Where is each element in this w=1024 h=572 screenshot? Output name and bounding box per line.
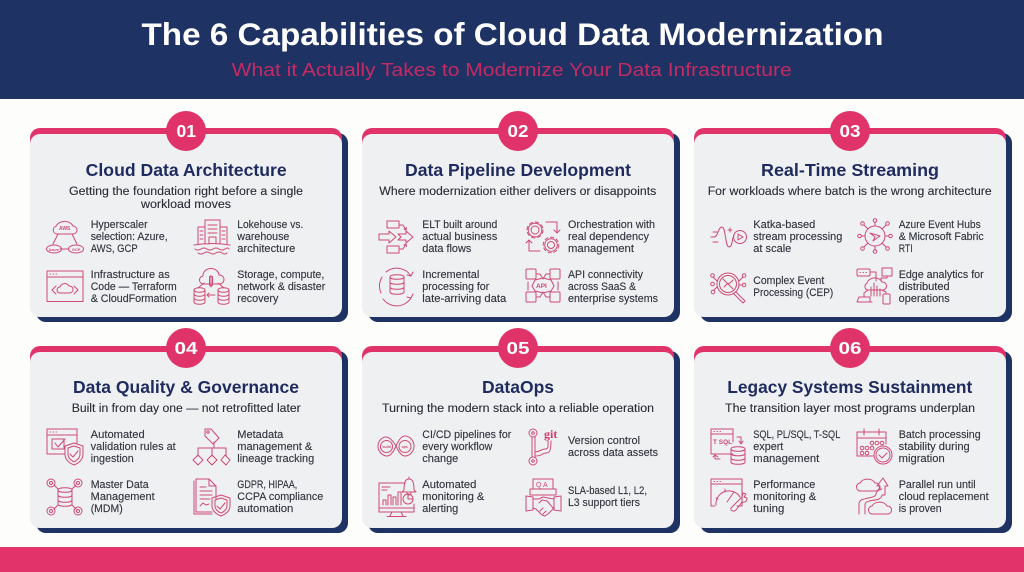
item text: performance: monitoring & bbox=[753, 491, 817, 503]
item text: parallel run: is proven bbox=[899, 503, 942, 515]
item text: orchestration bbox=[568, 219, 655, 255]
icon: ELT flow arrows bbox=[379, 221, 413, 253]
item text: orchestration: real dependency bbox=[568, 231, 650, 243]
item text: Azure Event Hubs bbox=[899, 219, 984, 255]
item text: batch: stability during bbox=[899, 441, 970, 453]
item text: lakehouse: architecture bbox=[237, 243, 295, 255]
item text: CI/CD bbox=[422, 429, 512, 465]
description: workload moves bbox=[140, 197, 231, 211]
item text: storage: recovery bbox=[237, 293, 279, 305]
item text: Azure Event Hubs: Azure Event Hubs bbox=[899, 219, 981, 231]
item text: orchestration: Orchestration with bbox=[568, 219, 655, 231]
item text: CEP: Processing (CEP) bbox=[753, 287, 833, 299]
item text: SQL: management bbox=[753, 453, 819, 465]
icon: Kafka stream wave bbox=[711, 227, 746, 247]
item text: API: across SaaS & bbox=[568, 281, 637, 293]
item text: parallel run: Parallel run until bbox=[899, 479, 976, 491]
badge 04: 04 bbox=[174, 338, 198, 358]
item text: GDPR: CCPA compliance bbox=[237, 491, 323, 503]
description: Where modernization either delivers or disappoints bbox=[379, 184, 656, 198]
item text: Azure Event Hubs: & Microsoft Fabric bbox=[899, 231, 984, 243]
item text: ELT bbox=[422, 219, 498, 255]
heading: Legacy Systems Sustainment bbox=[727, 377, 972, 397]
icon: multi-cloud AWS Azure GCP: AWS bbox=[59, 226, 71, 232]
heading: Cloud Data Architecture bbox=[86, 160, 287, 180]
heading: Data Quality & Governance bbox=[73, 377, 299, 397]
header band bbox=[0, 0, 1024, 99]
icon: metadata tags tree bbox=[193, 429, 230, 465]
panel: 05 DataOps bbox=[362, 328, 680, 533]
item text: GDPR bbox=[237, 479, 323, 515]
item text: CI/CD: every workflow bbox=[422, 441, 492, 453]
item text: Kafka: at scale bbox=[753, 243, 791, 255]
badge 05 bbox=[498, 328, 538, 368]
description: For workloads where batch is the wrong architecture bbox=[708, 184, 992, 198]
panel: 03 Real-Time Streaming bbox=[694, 111, 1012, 322]
badge 04 bbox=[166, 328, 206, 368]
badge 01: 01 bbox=[176, 121, 196, 141]
badge 03 bbox=[830, 111, 870, 151]
icon: lakehouse building bbox=[194, 220, 230, 254]
badge 03: 03 bbox=[840, 121, 861, 141]
item text: performance: tuning bbox=[753, 503, 784, 515]
item text: monitoring: alerting bbox=[422, 503, 458, 515]
badge 01 bbox=[166, 111, 206, 151]
icon: multi-cloud AWS Azure GCP: Azure bbox=[48, 248, 59, 252]
heading: Real-Time Streaming bbox=[761, 160, 939, 180]
item text: CEP bbox=[753, 275, 833, 299]
item text: incremental: late-arriving data bbox=[422, 293, 506, 305]
item text: GDPR: GDPR, HIPAA, bbox=[237, 479, 297, 491]
heading: Data Pipeline Development bbox=[405, 160, 631, 180]
item text: edge analytics: operations bbox=[899, 293, 950, 305]
item text: metadata bbox=[237, 429, 314, 465]
item text: validation: Automated bbox=[91, 429, 145, 441]
icon: multi-cloud AWS Azure GCP bbox=[46, 221, 84, 253]
item text: version control: across data assets bbox=[568, 447, 659, 459]
item text: Kafka: stream processing bbox=[753, 231, 842, 243]
item text: ELT: ELT built around bbox=[422, 219, 497, 231]
description: Turning the modern stack into a reliable operation bbox=[382, 401, 654, 415]
panel: 02 Data Pipeline Development bbox=[362, 111, 680, 322]
item text: SQL: expert bbox=[753, 441, 783, 453]
item text: Kafka bbox=[753, 219, 842, 255]
item text: SLA: L3 support tiers bbox=[568, 497, 641, 509]
item text: version control bbox=[568, 435, 659, 459]
item text: hyperscaler: selection: Azure, bbox=[91, 231, 168, 243]
item text: SQL: SQL, PL/SQL, T-SQL bbox=[753, 429, 840, 441]
item text: API bbox=[568, 269, 659, 305]
item text: API: API connectivity bbox=[568, 269, 644, 281]
item text: performance bbox=[753, 479, 817, 515]
icon: git branch bbox=[529, 427, 557, 465]
item text: hyperscaler: Hyperscaler bbox=[91, 219, 148, 231]
panel: 04 Data Quality & Governance bbox=[30, 328, 348, 533]
panel: 06 Legacy Systems Sustainment bbox=[694, 328, 1012, 533]
icon: SQL window database bbox=[711, 429, 745, 464]
item text: SQL bbox=[753, 429, 840, 465]
icon: multi-cloud AWS Azure GCP: GCP bbox=[72, 248, 81, 252]
item text: parallel run bbox=[899, 479, 989, 515]
badge 02: 02 bbox=[508, 121, 529, 141]
icon: event hub bbox=[858, 219, 892, 253]
icon: SLA handshake bbox=[526, 479, 561, 516]
item text: monitoring: Automated bbox=[422, 479, 476, 491]
icon: CI/CD infinity loop: build bbox=[382, 445, 391, 449]
item text: batch: Batch processing bbox=[899, 429, 981, 441]
item text: orchestration: management bbox=[568, 243, 634, 255]
icon: incremental database cycle bbox=[379, 268, 413, 306]
icon: performance gauge wrench bbox=[711, 479, 747, 511]
item text: metadata: management & bbox=[237, 441, 313, 453]
badge 05: 05 bbox=[506, 338, 530, 358]
item text: metadata: lineage tracking bbox=[237, 453, 314, 465]
item text: validation: validation rules at bbox=[91, 441, 176, 453]
item text: CI/CD: CI/CD pipelines for bbox=[422, 429, 512, 441]
item text: monitoring: monitoring & bbox=[422, 491, 485, 503]
item text: SLA bbox=[568, 485, 647, 509]
item text: incremental: Incremental bbox=[422, 269, 479, 281]
icon: API connectivity: API bbox=[536, 283, 547, 290]
item text: MDM: Master Data bbox=[91, 479, 149, 491]
item text: storage bbox=[237, 269, 326, 305]
icon: SLA handshake: Q A bbox=[536, 482, 548, 489]
item text: CI/CD: change bbox=[422, 453, 458, 465]
item text: Kafka: Katka-based bbox=[753, 219, 815, 231]
icon: SQL window database: T SQL bbox=[713, 439, 732, 446]
icon: parallel run cloud path bbox=[856, 478, 892, 514]
item text: lakehouse: warehouse bbox=[236, 231, 289, 243]
item text: ELT: data flows bbox=[422, 243, 472, 255]
panel: 01 Cloud Data Architecture bbox=[30, 111, 348, 322]
item text: edge analytics: distributed bbox=[899, 281, 950, 293]
description: The transition layer most programs underplan bbox=[725, 401, 975, 415]
item text: GDPR: automation bbox=[237, 503, 293, 515]
item text: SLA: SLA-based L1, L2, bbox=[568, 485, 647, 497]
icon: gears orchestration bbox=[526, 222, 560, 253]
icon: CI/CD infinity loop bbox=[378, 436, 414, 456]
item text: incremental: processing for bbox=[422, 281, 490, 293]
icon: compliance document shield bbox=[194, 479, 230, 516]
item text: incremental bbox=[422, 269, 506, 305]
icon: validation check shield bbox=[47, 429, 83, 465]
icon: infrastructure as code window bbox=[47, 271, 83, 302]
icon: CI/CD infinity loop: ops bbox=[402, 445, 408, 449]
description bbox=[69, 184, 303, 211]
title: The 6 Capabilities of Cloud Data Modernization bbox=[142, 16, 884, 52]
description: Getting the foundation right before a single bbox=[69, 184, 303, 198]
subtitle: What it Actually Takes to Modernize Your Data Infrastructure bbox=[232, 59, 792, 80]
description: Built in from day one — not retrofitted later bbox=[72, 401, 301, 415]
item text: infrastructure as code: & CloudFormation bbox=[91, 293, 177, 305]
footer band bbox=[0, 547, 1024, 572]
item text: edge analytics: Edge analytics for bbox=[899, 269, 984, 281]
item text: hyperscaler: AWS, GCP bbox=[91, 243, 138, 255]
item text: validation bbox=[91, 429, 176, 465]
item text: infrastructure as code bbox=[91, 269, 177, 305]
item text: hyperscaler bbox=[91, 219, 168, 255]
item text: parallel run: cloud replacement bbox=[899, 491, 989, 503]
item text: validation: ingestion bbox=[91, 453, 134, 465]
item text: monitoring bbox=[422, 479, 485, 515]
badge 02 bbox=[498, 111, 538, 151]
item text: storage: Storage, compute, bbox=[237, 269, 324, 281]
item text: batch bbox=[899, 429, 981, 465]
heading: DataOps bbox=[482, 377, 554, 397]
item text: infrastructure as code: Code — Terraform bbox=[91, 281, 177, 293]
icon: complex event magnifier bbox=[711, 273, 746, 303]
item text: version control: Version control bbox=[568, 435, 640, 447]
item text: Azure Event Hubs: RTI bbox=[899, 243, 913, 255]
item text: MDM bbox=[91, 479, 155, 515]
icon: API connectivity bbox=[526, 269, 560, 302]
item text: edge analytics bbox=[899, 269, 984, 305]
item text: ELT: actual business bbox=[422, 231, 498, 243]
item text: MDM: (MDM) bbox=[91, 503, 123, 515]
icon: git branch: git bbox=[544, 427, 557, 441]
item text: metadata: Metadata bbox=[237, 429, 283, 441]
item text: lakehouse bbox=[236, 219, 303, 255]
icon: edge analytics network bbox=[857, 268, 892, 304]
icon: storage compute network bbox=[194, 268, 229, 304]
item text: batch: migration bbox=[899, 453, 945, 465]
icon: master data hub bbox=[47, 479, 82, 515]
item text: infrastructure as code: Infrastructure as bbox=[91, 269, 170, 281]
item text: performance: Performance bbox=[753, 479, 815, 491]
icon: monitoring dashboard bell bbox=[379, 477, 416, 516]
item text: lakehouse: Lokehouse vs. bbox=[237, 219, 303, 231]
item text: CEP: Complex Event bbox=[753, 275, 824, 287]
badge 06 bbox=[830, 328, 870, 368]
icon: batch calendar clock bbox=[857, 429, 892, 464]
item text: API: enterprise systems bbox=[568, 293, 659, 305]
item text: MDM: Management bbox=[91, 491, 155, 503]
item text: storage: network & disaster bbox=[237, 281, 326, 293]
badge 06: 06 bbox=[838, 338, 862, 358]
